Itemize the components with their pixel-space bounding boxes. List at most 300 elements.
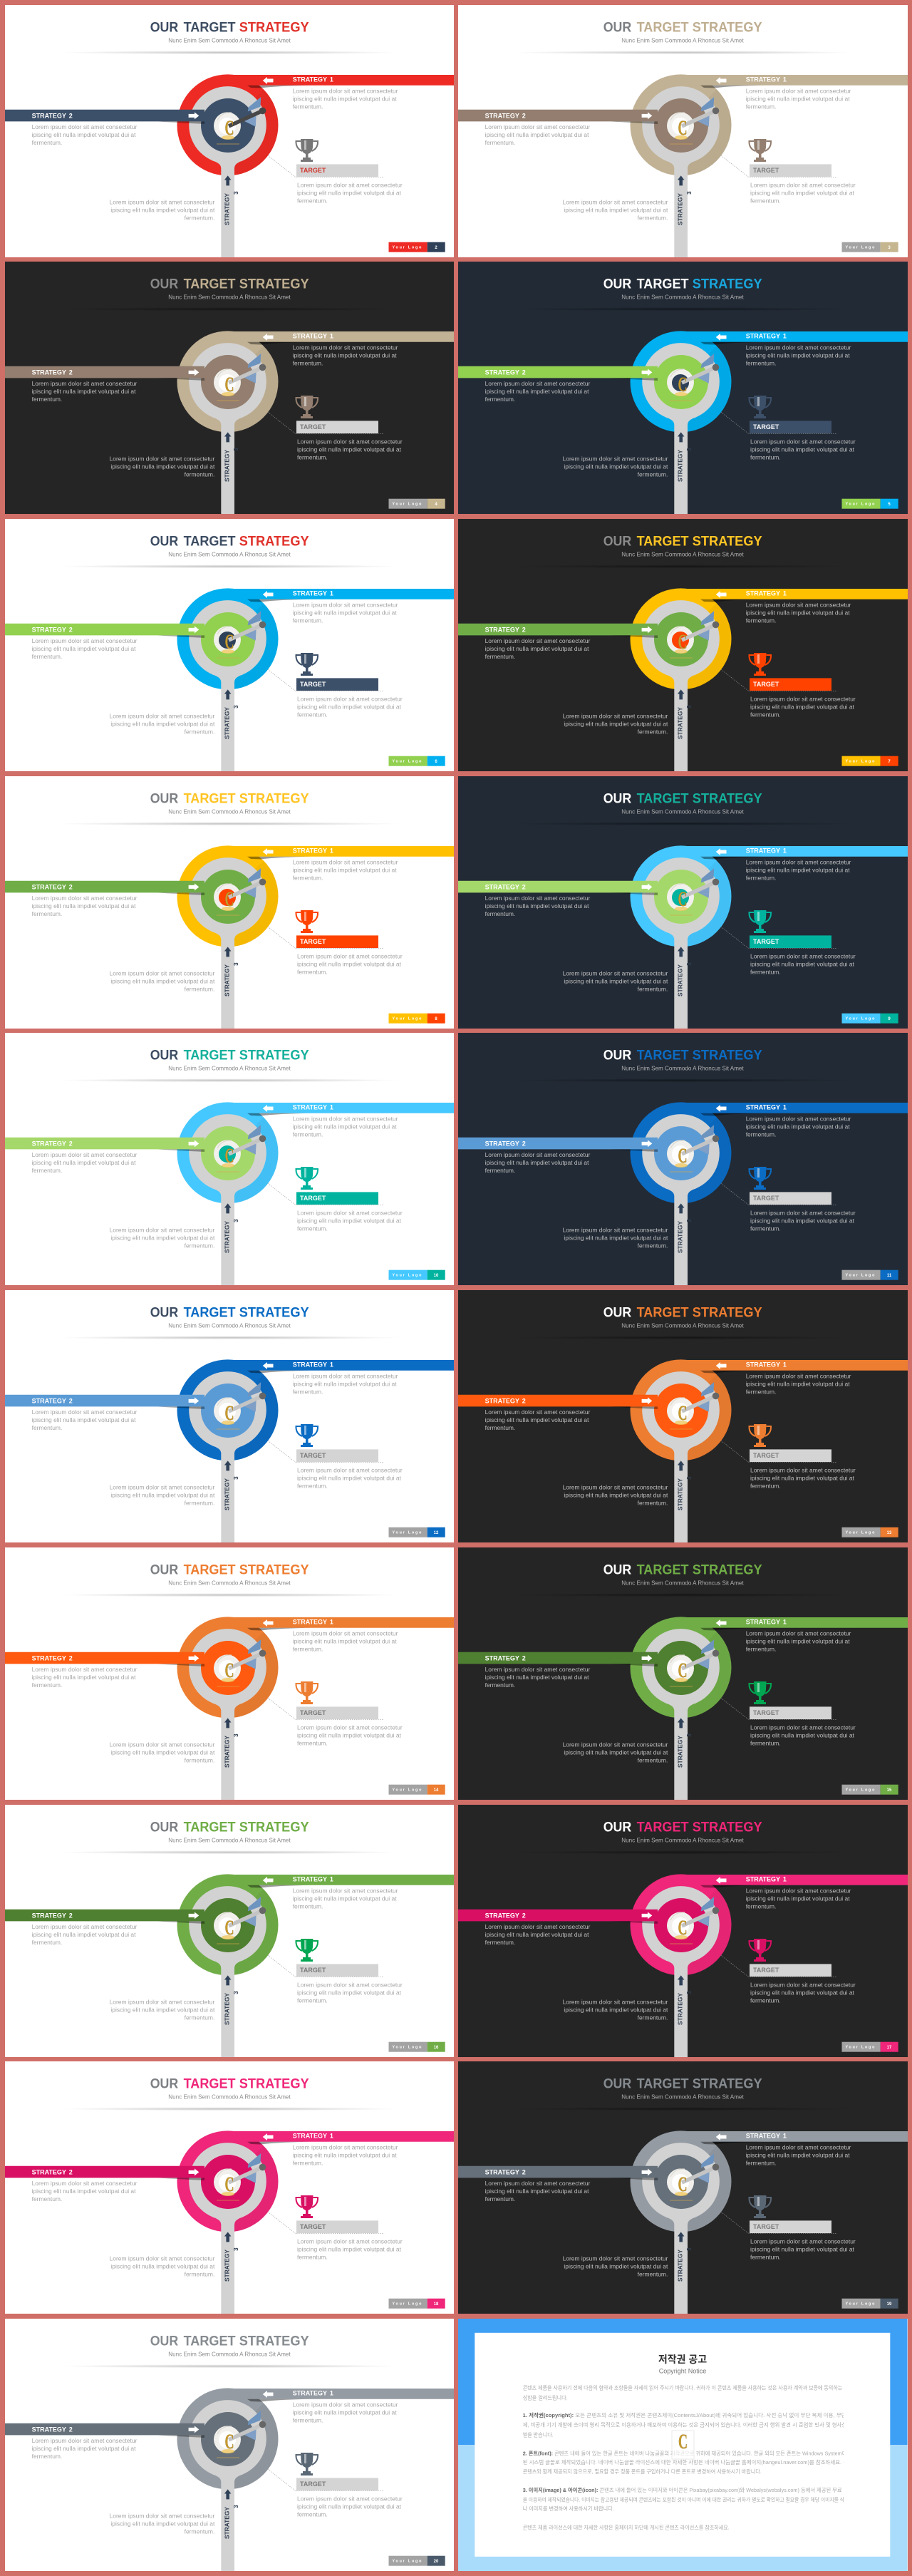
icon: trophy [750,1167,771,1190]
strategy 2 text: fermentum. [485,139,515,146]
panel: slide 2 red and navy [4,5,454,257]
target text: Lorem ipsum dolor sit amet consectetur [296,2238,402,2245]
subtitle: Nunc Enim Sem Commodo A Rhoncus Sit Amet [168,294,291,301]
title [150,2076,309,2092]
logo badge and page number [842,2299,898,2309]
strategy 2 text: ipiscing elit nulla impdiet volutpat dui at [31,1674,136,1681]
strategy 1 label: STRATEGY 1 [292,2390,333,2397]
target label box [296,1706,378,1719]
notice card [475,2333,890,2557]
icon: trophy [296,910,318,933]
logo badge and page number [842,756,898,766]
subtitle: Nunc Enim Sem Commodo A Rhoncus Sit Amet [168,551,291,557]
title: STRATEGY [693,277,762,292]
strategy 3 label: 3 [232,448,239,451]
strategy 2 label: STRATEGY 2 [31,1654,72,1661]
subtitle: Nunc Enim Sem Commodo A Rhoncus Sit Amet [621,551,745,557]
title: TARGET [637,277,689,292]
target text: fermentum. [750,197,781,204]
strategy 3 label [677,1990,693,2024]
subtitle: Nunc Enim Sem Commodo A Rhoncus Sit Amet [168,2094,291,2101]
icon: trophy [296,2195,318,2218]
target label box [296,678,378,691]
strategy 3 text: fermentum. [638,1756,668,1763]
title: OUR [603,1562,631,1577]
strategy 2 text: Lorem ipsum dolor sit amet consectetur [485,1408,591,1416]
strategy 2 text: ipiscing elit nulla impdiet volutpat dui at [485,131,589,138]
strategy 2 text: ipiscing elit nulla impdiet volutpat dui at [485,2188,589,2195]
target text: fermentum. [296,968,327,975]
strategy 3 text: fermentum. [184,471,214,478]
notice subheading: Copyright Notice [659,2367,706,2374]
title: TARGET [183,2333,235,2349]
target label box: TARGET [753,1452,779,1459]
strategy 2 text: fermentum. [485,1167,515,1174]
target diagram with strategy bars and arrows [458,1593,908,1800]
target text: Lorem ipsum dolor sit amet consectetur [296,1467,402,1474]
strategy 1 text: ipiscing elit nulla impdiet volutpat dui at [292,1895,397,1902]
logo badge and page number: 4 [435,503,437,507]
logo badge and page number: 12 [433,1531,438,1535]
target label box: TARGET [299,1452,326,1459]
panel: slide 7 yellow on dark [458,519,908,771]
title: OUR [150,277,178,292]
logo badge and page number: Your Logo [392,503,423,507]
strategy 2 label: STRATEGY 2 [485,2169,526,2176]
strategy 1 text: Lorem ipsum dolor sit amet consectetur [746,1887,851,1894]
target diagram with strategy bars and arrows [458,565,908,771]
strategy 1 text: Lorem ipsum dolor sit amet consectetur [292,87,398,94]
strategy 3 label: 3 [232,191,239,195]
target label box: TARGET [753,681,779,688]
strategy 3 text: ipiscing elit nulla impdiet volutpat dui at [110,1235,214,1242]
icon: trophy [296,139,318,162]
title: STRATEGY [693,533,762,549]
strategy 1 text: fermentum. [292,1131,323,1138]
target text: ipiscing elit nulla impdiet volutpat dui at [750,704,855,711]
logo badge and page number [842,499,898,509]
subtitle: Nunc Enim Sem Commodo A Rhoncus Sit Amet [621,1837,745,1843]
logo badge and page number [388,756,445,766]
strategy 3 text: Lorem ipsum dolor sit amet consectetur [563,969,668,977]
logo badge and page number [388,1784,445,1794]
strategy 3 text: ipiscing elit nulla impdiet volutpat dui at [564,206,668,213]
strategy 1 label: STRATEGY 1 [292,1361,333,1369]
logo badge and page number [842,1527,898,1537]
strategy 3 label [677,448,693,482]
strategy 3 text: ipiscing elit nulla impdiet volutpat dui at [564,463,668,470]
target text: fermentum. [750,1225,781,1232]
logo badge and page number: Your Logo [846,245,876,249]
target label box [750,935,831,948]
title: TARGET [637,1048,689,1063]
target diagram with strategy bars and arrows [4,822,455,1029]
strategy 2 text: fermentum. [485,396,515,403]
target text: fermentum. [296,197,327,204]
icon: trophy [750,396,771,418]
target text: fermentum. [296,1997,327,2004]
strategy 1 text: Lorem ipsum dolor sit amet consectetur [292,344,398,351]
strategy 1 text: fermentum. [746,874,777,881]
strategy 3 text: ipiscing elit nulla impdiet volutpat dui at [110,2263,214,2270]
strategy 2 text: Lorem ipsum dolor sit amet consectetur [31,1923,137,1930]
strategy 2 text: Lorem ipsum dolor sit amet consectetur [485,895,591,902]
strategy 2 text: Lorem ipsum dolor sit amet consectetur [31,2437,137,2444]
target diagram with strategy bars and arrows [458,307,908,514]
target text: ipiscing elit nulla impdiet volutpat dui at [296,189,401,196]
title: OUR [603,2076,631,2092]
strategy 3 label: STRATEGY [677,1221,684,1253]
strategy 2 text: ipiscing elit nulla impdiet volutpat dui at [485,1674,589,1681]
center emblem: C [678,1659,688,1682]
title [150,1819,309,1835]
strategy 1 label: STRATEGY 1 [746,333,787,340]
target label box [296,935,378,948]
strategy 3 label: STRATEGY [223,707,230,739]
subtitle: Nunc Enim Sem Commodo A Rhoncus Sit Amet [621,1580,745,1586]
logo badge and page number: 3 [888,245,891,249]
strategy 3 label: 3 [685,2247,693,2251]
logo badge and page number: Your Logo [846,1788,876,1792]
strategy 2 text: fermentum. [485,910,515,917]
title: STRATEGY [239,1305,309,1321]
target label box: TARGET [753,2223,779,2230]
strategy 2 text: Lorem ipsum dolor sit amet consectetur [485,2180,591,2187]
strategy 2 label: STRATEGY 2 [31,2426,72,2433]
logo badge and page number: 9 [888,1016,891,1021]
strategy 3 text: ipiscing elit nulla impdiet volutpat dui at [110,1748,214,1756]
center emblem: C [678,1144,688,1168]
title: OUR [603,533,631,549]
strategy 2 text: ipiscing elit nulla impdiet volutpat dui at [485,1930,589,1937]
strategy 1 text: fermentum. [292,1645,323,1652]
strategy 3 label: STRATEGY [677,2250,684,2282]
strategy 2 label: STRATEGY 2 [31,1912,72,1919]
strategy 2 text: Lorem ipsum dolor sit amet consectetur [31,123,137,130]
strategy 2 text: Lorem ipsum dolor sit amet consectetur [31,2180,137,2187]
target text: fermentum. [750,454,781,461]
title [603,2076,762,2092]
strategy 2 text: fermentum. [31,1681,62,1689]
target label box: TARGET [299,166,326,173]
title [150,2333,309,2349]
strategy 1 text: ipiscing elit nulla impdiet volutpat dui at [292,1123,397,1130]
subtitle: Nunc Enim Sem Commodo A Rhoncus Sit Amet [621,1066,745,1072]
strategy 3 text: ipiscing elit nulla impdiet volutpat dui at [564,1235,668,1242]
center emblem: C [224,887,234,911]
target label box: TARGET [299,2223,326,2230]
strategy 2 text: ipiscing elit nulla impdiet volutpat dui at [31,2188,136,2195]
target text: Lorem ipsum dolor sit amet consectetur [750,1724,856,1731]
notice body text: 된 시스템 글꼴로 제작되었습니다. 네이버 나눔글꼴 라이선스에 대한 자세한 사항은 네이버 나눔글꼴 홈페이지(hangeul.naver.com)를 참조하세요. 폰트는 [523,2459,858,2466]
strategy 3 text: Lorem ipsum dolor sit amet consectetur [109,2255,214,2262]
strategy 1 text: ipiscing elit nulla impdiet volutpat dui at [292,2152,397,2159]
strategy 2 text: ipiscing elit nulla impdiet volutpat dui at [31,131,136,138]
strategy 1 label: STRATEGY 1 [292,2133,333,2140]
title [603,533,762,549]
title: TARGET [637,790,689,806]
center emblem: C [224,2430,234,2453]
strategy 3 text: Lorem ipsum dolor sit amet consectetur [563,1998,668,2005]
strategy 1 text: fermentum. [292,103,323,110]
strategy 2 text: ipiscing elit nulla impdiet volutpat dui at [485,1416,589,1423]
icon: trophy [750,1939,771,1962]
notice heading: 저작권 공고 [658,2354,707,2365]
strategy 1 text: ipiscing elit nulla impdiet volutpat dui at [292,1637,397,1644]
panel: slide 19 gray on dark [458,2061,908,2314]
strategy 3 label: 3 [685,1733,693,1737]
logo badge and page number: Your Logo [846,503,876,507]
target text: ipiscing elit nulla impdiet volutpat dui at [750,1731,855,1738]
logo badge and page number: 10 [433,1274,438,1278]
strategy 2 label: STRATEGY 2 [31,2169,72,2176]
strategy 2 label: STRATEGY 2 [31,112,72,119]
center emblem: C [224,1659,234,1682]
title: OUR [603,1305,631,1321]
strategy 3 text: fermentum. [638,2014,668,2021]
strategy 1 text: ipiscing elit nulla impdiet volutpat dui at [746,2152,850,2159]
strategy 3 text: fermentum. [184,728,214,735]
panel: slide 4 tan on dark [4,262,454,514]
strategy 3 text: ipiscing elit nulla impdiet volutpat dui at [564,2263,668,2270]
target text: Lorem ipsum dolor sit amet consectetur [750,696,856,703]
strategy 1 text: fermentum. [746,617,777,624]
center emblem: C [678,1401,688,1425]
strategy 3 label: STRATEGY [223,964,230,996]
strategy 2 label: STRATEGY 2 [485,112,526,119]
strategy 3 text: ipiscing elit nulla impdiet volutpat dui at [564,977,668,984]
target text: Lorem ipsum dolor sit amet consectetur [750,1210,856,1217]
target diagram with strategy bars and arrows [4,1336,455,1542]
logo badge and page number: 11 [887,1274,892,1278]
strategy 3 label: 3 [685,1476,693,1480]
strategy 2 text: ipiscing elit nulla impdiet volutpat dui at [31,645,136,652]
target text: ipiscing elit nulla impdiet volutpat dui at [296,1475,401,1482]
strategy 3 text: ipiscing elit nulla impdiet volutpat dui at [110,720,214,727]
strategy 1 text: Lorem ipsum dolor sit amet consectetur [292,858,398,865]
target diagram with strategy bars and arrows [4,1593,455,1800]
target text: Lorem ipsum dolor sit amet consectetur [296,2495,402,2503]
panel: copyright notice [458,2319,908,2571]
panel: slide 6 blue and green on white [4,519,454,771]
title: TARGET [183,533,235,549]
strategy 3 label: STRATEGY [223,2250,230,2282]
logo badge and page number: 14 [433,1788,438,1793]
notice body text: 콘텐츠 제품 라이선스에 대한 자세한 사항은 홈페이지 하단에 게시된 콘텐츠 라이선스를 참조하세요. [523,2524,730,2530]
strategy 2 label: STRATEGY 2 [31,626,72,633]
title [150,1048,309,1063]
subtitle: Nunc Enim Sem Commodo A Rhoncus Sit Amet [168,1580,291,1586]
target text: fermentum. [296,2254,327,2261]
strategy 1 text: Lorem ipsum dolor sit amet consectetur [292,2401,398,2408]
strategy 1 text: fermentum. [746,1645,777,1652]
panel: slide 16 green on white [4,1805,454,2057]
target diagram with strategy bars and arrows [4,1850,455,2057]
strategy 1 label: STRATEGY 1 [292,1104,333,1111]
subtitle: Nunc Enim Sem Commodo A Rhoncus Sit Amet [621,1322,745,1329]
strategy 3 text: ipiscing elit nulla impdiet volutpat dui at [110,2520,214,2527]
strategy 1 label: STRATEGY 1 [746,1361,787,1369]
logo badge and page number [842,2041,898,2051]
icon: trophy [750,139,771,162]
title [150,790,309,806]
strategy 3 text: Lorem ipsum dolor sit amet consectetur [109,1227,214,1234]
title: OUR [150,1819,178,1835]
title [603,1048,762,1063]
strategy 3 text: fermentum. [184,985,214,992]
target label box [296,421,378,433]
strategy 2 label: STRATEGY 2 [485,1140,526,1148]
notice body text: 을 이용하여 제작되었습니다. 이미지는 참고용만 제공되며 콘텐츠에는 포함된 것이 아니며 이에 대한 권리는 귀하가 별도로 확인하고 필요할 경우 해당 이미지를 삭제하거 [523,2496,858,2503]
strategy 3 label: STRATEGY [677,192,684,225]
strategy 3 text: Lorem ipsum dolor sit amet consectetur [563,2255,668,2262]
strategy 3 label: 3 [232,962,239,966]
title: TARGET [183,2076,235,2092]
strategy 1 label: STRATEGY 1 [292,1618,333,1625]
strategy 1 text: Lorem ipsum dolor sit amet consectetur [292,1116,398,1123]
center emblem: C [678,887,688,911]
strategy 1 text: ipiscing elit nulla impdiet volutpat dui at [292,2408,397,2416]
title [603,19,762,35]
strategy 2 text: Lorem ipsum dolor sit amet consectetur [485,380,591,387]
target text: fermentum. [296,454,327,461]
strategy 3 text: fermentum. [184,1756,214,1763]
target text: Lorem ipsum dolor sit amet consectetur [296,696,402,703]
logo badge and page number: Your Logo [392,1788,423,1792]
center emblem: C [224,116,234,140]
title: OUR [603,19,631,35]
strategy 3 text: Lorem ipsum dolor sit amet consectetur [109,455,214,463]
notice body text: 제, 비공개 기기 개발에 쓰이며 영리 목적으로 이용하거나 배포하여 이용하는 것은 금지되어 있습니다. 이러한 금지 행위 발견 시 준엄한 민사 및 형사상의 처 [523,2421,858,2428]
strategy 3 label: STRATEGY [223,450,230,482]
subtitle: Nunc Enim Sem Commodo A Rhoncus Sit Amet [621,294,745,301]
icon: trophy [296,396,318,418]
title [150,19,309,35]
icon: trophy [750,1681,771,1704]
strategy 1 text: ipiscing elit nulla impdiet volutpat dui at [746,866,850,873]
logo badge and page number: Your Logo [392,2559,423,2563]
center emblem: C [224,1916,234,1939]
icon: trophy [296,2453,318,2475]
strategy 1 text: Lorem ipsum dolor sit amet consectetur [746,1629,851,1637]
title: STRATEGY [693,790,762,806]
title: OUR [150,1305,178,1321]
panel: slide 14 orange on white [4,1547,454,1800]
notice body text: 콘텐츠 제품을 사용하기 전에 다음의 협약과 조항들을 자세히 읽어 주시기 바랍니다. 귀하가 이 콘텐츠 제품을 사용하는 것은 사용자 계약과 보증에 동의하는 것임을 [523,2384,858,2391]
target diagram with strategy bars and arrows [4,2107,455,2314]
logo badge and page number: 17 [887,2045,892,2049]
logo badge and page number: Your Logo [392,760,423,764]
strategy 2 text: Lorem ipsum dolor sit amet consectetur [31,1408,137,1416]
strategy 2 text: Lorem ipsum dolor sit amet consectetur [31,1151,137,1158]
notice body text: 2. 폰트(font): 콘텐츠 내에 들어 있는 한글 폰트는 네이버 나눔글꼴의 저작권으로 귀하에 제공되어 있습니다. 한글 외의 모든 폰트는 Windows System에 포함 [523,2450,858,2456]
strategy 1 label: STRATEGY 1 [292,333,333,340]
strategy 3 text: ipiscing elit nulla impdiet volutpat dui at [564,720,668,727]
icon: trophy [296,1424,318,1447]
strategy 1 text: ipiscing elit nulla impdiet volutpat dui at [292,609,397,616]
logo badge and page number: Your Logo [392,2045,423,2049]
panel: slide 15 green on dark [458,1547,908,1800]
title: TARGET [183,1305,235,1321]
strategy 1 text: ipiscing elit nulla impdiet volutpat dui at [292,1380,397,1387]
strategy 1 label: STRATEGY 1 [746,1618,787,1625]
panel: slide 18 pink on white [4,2061,454,2314]
strategy 2 text: fermentum. [485,1939,515,1946]
target text: Lorem ipsum dolor sit amet consectetur [750,952,856,959]
notice body text: 1. 저작권(copyright): 모든 콘텐츠의 소유 및 저작권은 콘텐츠제이(ContentsJ/About)에 귀속되어 있습니다. 사전 승낙 없이 무단 복제 이용, 무단 전재 [523,2412,858,2418]
target label box [750,164,831,177]
logo badge and page number [842,1013,898,1023]
title [603,277,762,292]
target text: Lorem ipsum dolor sit amet consectetur [750,438,856,445]
strategy 2 text: fermentum. [485,1681,515,1689]
target text: ipiscing elit nulla impdiet volutpat dui at [296,704,401,711]
strategy 3 label: STRATEGY [223,1221,230,1253]
strategy 1 text: Lorem ipsum dolor sit amet consectetur [292,601,398,608]
strategy 1 text: Lorem ipsum dolor sit amet consectetur [746,858,851,865]
strategy 3 label: STRATEGY [677,1478,684,1510]
target text: Lorem ipsum dolor sit amet consectetur [296,181,402,188]
strategy 1 label: STRATEGY 1 [746,847,787,854]
logo badge and page number: 18 [433,2302,438,2307]
strategy 3 label [223,1990,239,2024]
logo badge and page number: 7 [888,760,891,764]
strategy 1 text: fermentum. [292,2160,323,2167]
strategy 3 label [223,448,239,482]
title: STRATEGY [239,2076,309,2092]
strategy 3 text: fermentum. [184,2014,214,2021]
notice body text: 벌을 받습니다. [523,2431,554,2438]
target label box: TARGET [753,1195,779,1202]
logo badge and page number: 16 [433,2045,438,2049]
target diagram with strategy bars and arrows [458,822,908,1029]
strategy 1 text: Lorem ipsum dolor sit amet consectetur [292,1629,398,1637]
strategy 2 text: ipiscing elit nulla impdiet volutpat dui at [485,1159,589,1166]
logo badge and page number: Your Logo [392,1016,423,1021]
target label box [750,1964,831,1976]
center emblem: C [678,630,688,654]
target diagram with strategy bars and arrows [458,2107,908,2314]
logo badge and page number: 8 [435,1016,437,1021]
strategy 3 label: 3 [232,2247,239,2251]
strategy 1 text: Lorem ipsum dolor sit amet consectetur [746,344,851,351]
icon: trophy [296,1167,318,1190]
title: OUR [603,1048,631,1063]
target diagram with strategy bars and arrows [458,1336,908,1542]
center emblem: C [224,630,234,654]
strategy 3 text: ipiscing elit nulla impdiet volutpat dui at [564,1491,668,1498]
icon: trophy [750,910,771,933]
strategy 1 text: fermentum. [746,1902,777,1910]
strategy 3 label [223,705,239,739]
center emblem: C [224,373,234,396]
strategy 3 text: ipiscing elit nulla impdiet volutpat dui at [110,463,214,470]
strategy 3 label: STRATEGY [677,707,684,739]
center emblem: C [224,2173,234,2196]
target diagram with strategy bars and arrows [4,51,455,257]
strategy 1 text: ipiscing elit nulla impdiet volutpat dui at [746,1637,850,1644]
logo badge and page number [388,1527,445,1537]
target text: ipiscing elit nulla impdiet volutpat dui at [296,2246,401,2253]
logo badge and page number [842,1270,898,1280]
logo badge and page number: Your Logo [846,1531,876,1535]
strategy 3 text: Lorem ipsum dolor sit amet consectetur [563,1227,668,1234]
strategy 3 label: STRATEGY [223,2506,230,2539]
target text: ipiscing elit nulla impdiet volutpat dui at [750,1475,855,1482]
strategy 1 text: Lorem ipsum dolor sit amet consectetur [746,601,851,608]
strategy 3 label: STRATEGY [677,1992,684,2024]
center emblem: C [678,2173,688,2196]
